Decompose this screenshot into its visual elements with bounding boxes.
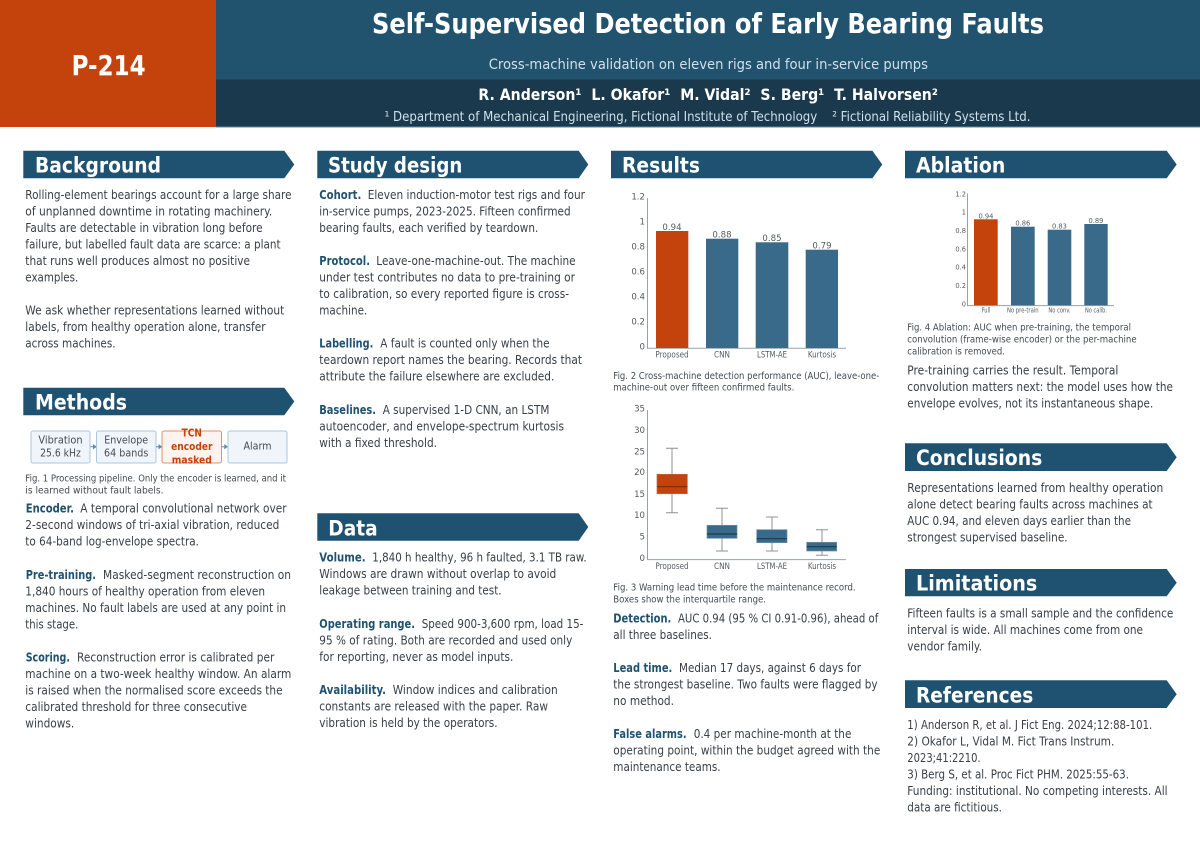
caption: figure 1	[25, 474, 286, 496]
text: methods	[25, 502, 291, 730]
bar chart: AUC: 1	[640, 218, 645, 228]
text: data: Operating range.	[319, 617, 415, 631]
text: background: that runs well produces almost no positive	[25, 254, 250, 268]
panel: conclusions	[905, 443, 1177, 545]
title: Self-Supervised Detection of Early Bearing Faults	[372, 7, 1044, 40]
text: study design: Baselines.	[319, 403, 376, 417]
bar chart: ablation	[955, 190, 1114, 314]
text: conclusions: strongest supervised baseline.	[907, 531, 1068, 545]
text: results: no method.	[613, 694, 674, 708]
box: TCN encoder: encoder	[171, 440, 213, 453]
heading: references: References	[916, 683, 1033, 708]
text: references: 2023;41:2210.	[907, 751, 981, 765]
bar chart: AUC: 0.79	[812, 242, 832, 252]
bar chart: ablation: 0.83	[1052, 223, 1067, 231]
box plot: lead time: 10	[634, 511, 645, 521]
box: vibration: Vibration	[38, 433, 83, 446]
bar chart: ablation: 1.2	[955, 190, 966, 198]
text: references: 1) Anderson R, et al. J Fict Eng. 2024;12:88-101.	[907, 718, 1152, 732]
text: ablation: Pre-training carries the result. Temporal	[907, 363, 1118, 377]
text: background: Rolling-element bearings account for a large share	[25, 188, 292, 202]
bar chart: AUC: 0.94	[662, 223, 682, 233]
text: methods: Pre-training.	[26, 568, 96, 582]
box plot: lead time: Kurtosis	[808, 562, 837, 572]
heading: data	[317, 513, 588, 541]
text: methods: is raised when the normalised score exceeds the	[25, 684, 283, 698]
text: results: Lead time.	[613, 661, 672, 675]
text: references	[907, 718, 1168, 815]
text: study design: Leave-one-machine-out. The machine	[376, 254, 576, 268]
heading: results	[611, 151, 882, 178]
box: TCN encoder: masked	[172, 453, 212, 466]
text: background: of unplanned downtime in rotating machinery.	[25, 204, 272, 218]
caption: figure 3	[613, 583, 856, 605]
text: results: False alarms.	[613, 727, 687, 741]
bar chart: ablation: No pre-train	[1007, 306, 1039, 314]
caption: figure 3: Boxes show the interquartile range.	[613, 594, 766, 605]
text: background	[25, 188, 292, 350]
header	[0, 0, 1200, 128]
text: data: vibration is held by the operators.	[319, 716, 498, 730]
caption: figure 4	[907, 323, 1137, 357]
bar chart: ablation: 0.2	[955, 282, 966, 290]
authors: R. Anderson¹ L. Okafor¹ M. Vidal² S. Berg¹ T. Halvorsen²	[478, 86, 938, 104]
heading: limitations	[905, 569, 1177, 597]
panel: references	[905, 680, 1177, 815]
bar chart: AUC: 0.8	[631, 243, 645, 253]
text: results: operating point, within the budget agreed with the	[613, 744, 880, 758]
text: data: Availability.	[319, 683, 386, 697]
heading: background	[23, 151, 294, 178]
box plot: lead time: 15	[634, 490, 645, 500]
text: conclusions: Representations learned from healthy operation	[907, 481, 1163, 495]
text: methods: to 64-band log-envelope spectra.	[25, 535, 199, 549]
affiliations: ¹ Department of Mechanical Engineering, Fictional Institute of Technology ² Fictional Reliability Systems Ltd.	[385, 110, 1031, 125]
heading: references	[905, 680, 1177, 708]
arrow	[222, 445, 227, 448]
text: study design: bearing faults, each verified by teardown.	[319, 221, 538, 235]
poster number	[0, 0, 216, 127]
caption: figure 1: is learned without fault labels.	[25, 485, 164, 496]
box plot: lead time: CNN	[714, 562, 730, 572]
bar chart: AUC: Proposed	[655, 351, 689, 361]
bar chart: ablation: 0.89	[1089, 217, 1103, 225]
bar chart: AUC: LSTM-AE	[757, 351, 787, 361]
text: study design: Eleven induction-motor test rigs and four	[368, 188, 586, 202]
heading: conclusions	[905, 443, 1177, 471]
box: envelope	[96, 431, 156, 463]
text: conclusions: alone detect bearing faults across machines at	[907, 497, 1153, 511]
heading: methods: Methods	[35, 390, 127, 415]
heading: results: Results	[622, 153, 700, 178]
text: methods: windows.	[25, 716, 74, 730]
bar chart: AUC: 0.2	[631, 318, 645, 328]
text: background: failure, but labelled fault data are scarce: a plant	[25, 238, 281, 252]
text: limitations: interval is wide. All machines come from one	[907, 623, 1143, 637]
text: study design: with a fixed threshold.	[319, 436, 437, 450]
text: ablation	[907, 363, 1173, 411]
bar chart: ablation: No conv.	[1048, 306, 1071, 314]
panel: background	[23, 151, 294, 350]
text: study design: under test contributes no data to pre-training or	[319, 270, 576, 284]
box plot: lead time: LSTM-AE	[757, 562, 787, 572]
bar chart: AUC: 0.85	[762, 234, 782, 244]
arrow	[90, 445, 96, 448]
caption: figure 3: Fig. 3 Warning lead time before the maintenance record.	[613, 583, 856, 594]
text: methods: this stage.	[25, 618, 78, 632]
text: results: the strongest baseline. Two faults were flagged by	[613, 678, 878, 692]
text: background: Faults are detectable in vibration long before	[25, 221, 263, 235]
box plot: lead time: Proposed	[655, 562, 689, 572]
bar chart: ablation: Full	[982, 306, 990, 314]
bar chart: AUC: 0.6	[631, 268, 645, 278]
heading: study design	[317, 151, 588, 178]
text: results: Median 17 days, against 6 days for	[679, 661, 862, 675]
heading: background: Background	[35, 153, 161, 178]
heading: limitations: Limitations	[916, 572, 1037, 597]
text: methods: Scoring.	[26, 650, 70, 664]
text: conclusions	[907, 481, 1163, 545]
text: data: leakage between training and test.	[319, 584, 502, 598]
box plot: lead time: 5	[640, 532, 645, 542]
text: data: 1,840 h healthy, 96 h faulted, 3.1 TB raw.	[372, 551, 587, 565]
text: methods: Reconstruction error is calibrated per	[77, 650, 275, 664]
box: alarm: Alarm	[244, 440, 272, 453]
text: methods: calibrated threshold for three consecutive	[25, 700, 247, 714]
caption: figure 4: Fig. 4 Ablation: AUC when pre-training, the temporal	[907, 323, 1131, 334]
bar chart: AUC: CNN	[714, 351, 730, 361]
text: references: data are fictitious.	[907, 801, 1002, 815]
text: results: Detection.	[613, 611, 671, 625]
text: data: 95 % of rating. Both are recorded and used only	[319, 634, 572, 648]
panel: limitations	[905, 569, 1177, 654]
text: methods: A temporal convolutional network over	[80, 502, 287, 516]
caption: figure 4: calibration is removed.	[907, 346, 1005, 357]
text: methods: Masked-segment reconstruction on	[103, 568, 291, 582]
box plot: lead time: 25	[634, 448, 645, 458]
arrow	[156, 445, 162, 448]
bar chart: AUC	[631, 192, 846, 361]
text: study design: A fault is counted only when the	[380, 337, 550, 351]
caption: figure 2	[613, 371, 880, 394]
bar chart: ablation: 0.8	[955, 227, 966, 235]
text: background: labels, from healthy operation alone, transfer	[25, 320, 266, 334]
pipeline diagram	[31, 427, 287, 466]
subtitle: Cross-machine validation on eleven rigs and four in-service pumps	[489, 57, 928, 73]
caption: figure 2: machine-out over fifteen confirmed faults.	[613, 383, 794, 394]
text: data: constants are released with the paper. Raw	[319, 700, 548, 714]
text: methods: machine on a two-week healthy window. An alarm	[25, 667, 291, 681]
text: study design: A supervised 1-D CNN, an LSTM	[383, 403, 549, 417]
text: data: Windows are drawn without overlap to avoid	[319, 567, 556, 581]
panel: ablation	[905, 151, 1177, 411]
text: background: examples.	[25, 270, 78, 284]
bar chart: ablation: 0.94	[979, 212, 993, 220]
text: study design	[319, 188, 586, 450]
bar chart: ablation: 0	[962, 300, 966, 308]
text: methods: 1,840 hours of healthy operation from eleven	[25, 584, 265, 598]
text: results: AUC 0.94 (95 % CI 0.91-0.96), ahead of	[678, 611, 879, 625]
text: results: all three baselines.	[613, 628, 712, 642]
bar chart: ablation: 1	[962, 209, 966, 217]
bar chart: ablation: 0.4	[955, 264, 966, 272]
bar chart: AUC: 0.4	[631, 292, 645, 302]
text: methods: 2-second windows of tri-axial vibration, reduced	[25, 518, 279, 532]
text: study design: autoencoder, and envelope-spectrum kurtosis	[319, 420, 564, 434]
box: vibration	[31, 431, 90, 463]
text: conclusions: AUC 0.94, and eleven days earlier than the	[907, 514, 1131, 528]
poster number: P-214	[72, 49, 146, 82]
box: envelope: Envelope	[104, 433, 149, 446]
text: results: 0.4 per machine-month at the	[694, 727, 851, 741]
caption: figure 4: convolution (frame-wise encoder) or the per-machine	[907, 334, 1137, 345]
text: references: 3) Berg S, et al. Proc Fict PHM. 2025:55-63.	[907, 767, 1129, 781]
bar chart: AUC: 1.2	[631, 192, 645, 202]
text: study design: Labelling.	[319, 337, 373, 351]
bar chart: ablation: No calib.	[1085, 306, 1107, 314]
text: background: We ask whether representations learned without	[25, 304, 284, 318]
text: background: across machines.	[25, 336, 116, 350]
text: ablation: envelope evolves, not its instantaneous shape.	[907, 397, 1153, 411]
text: methods: machines. No fault labels are used at any point in	[25, 601, 286, 615]
box plot: lead time: 20	[634, 468, 645, 478]
panel: results	[611, 151, 882, 774]
heading: ablation	[905, 151, 1177, 178]
caption: figure 2: Fig. 2 Cross-machine detection performance (AUC), leave-one-	[613, 371, 880, 382]
box: envelope: 64 bands	[104, 446, 149, 459]
bar chart: ablation: 0.6	[955, 245, 966, 253]
panel: data	[317, 513, 588, 730]
text: results: maintenance teams.	[613, 760, 721, 774]
box plot: lead time	[634, 404, 846, 572]
bar chart: AUC: 0.88	[712, 230, 732, 240]
box: vibration: 25.6 kHz	[40, 446, 81, 459]
box: TCN encoder	[162, 427, 222, 466]
heading: data: Data	[328, 516, 378, 541]
text: data: Speed 900-3,600 rpm, load 15-	[422, 617, 583, 631]
text: references: 2) Okafor L, Vidal M. Fict Trans Instrum.	[907, 734, 1114, 748]
heading: ablation: Ablation	[916, 153, 1005, 178]
box plot: lead time: 30	[634, 426, 645, 436]
text: study design: in-service pumps, 2023-2025. Fifteen confirmed	[319, 204, 571, 218]
bar chart: ablation: 0.86	[1015, 220, 1030, 228]
text: data: Volume.	[319, 551, 366, 565]
text: study design: Cohort.	[319, 188, 361, 202]
caption: figure 1: Fig. 1 Processing pipeline. Only the encoder is learned, and it	[25, 474, 286, 485]
panel: methods	[23, 388, 294, 730]
heading: study design: Study design	[328, 153, 462, 178]
bar chart: AUC: 0	[640, 342, 645, 352]
text: data: Window indices and calibration	[393, 683, 558, 697]
box: alarm	[228, 431, 287, 463]
text: data: for reporting, never as model inputs.	[319, 650, 513, 664]
text: study design: attribute the failure elsewhere are excluded.	[319, 370, 554, 384]
text: study design: machine.	[319, 304, 367, 318]
text: study design: to calibration, so every reported figure is cross-	[319, 287, 569, 301]
box plot: lead time: 0	[640, 554, 645, 564]
text: data	[319, 551, 587, 730]
heading: methods	[23, 388, 294, 415]
heading: conclusions: Conclusions	[916, 446, 1042, 471]
text: study design: Protocol.	[319, 254, 370, 268]
text: limitations	[907, 607, 1173, 654]
panel: study design	[317, 151, 588, 450]
box plot: lead time: 35	[634, 404, 645, 414]
bar chart: AUC: Kurtosis	[808, 351, 837, 361]
text: methods: Encoder.	[26, 502, 74, 516]
box: TCN encoder: TCN	[182, 427, 202, 440]
text: limitations: vendor family.	[907, 640, 982, 654]
text: study design: teardown report names the bearing. Records that	[319, 353, 582, 367]
text: results	[613, 611, 880, 774]
